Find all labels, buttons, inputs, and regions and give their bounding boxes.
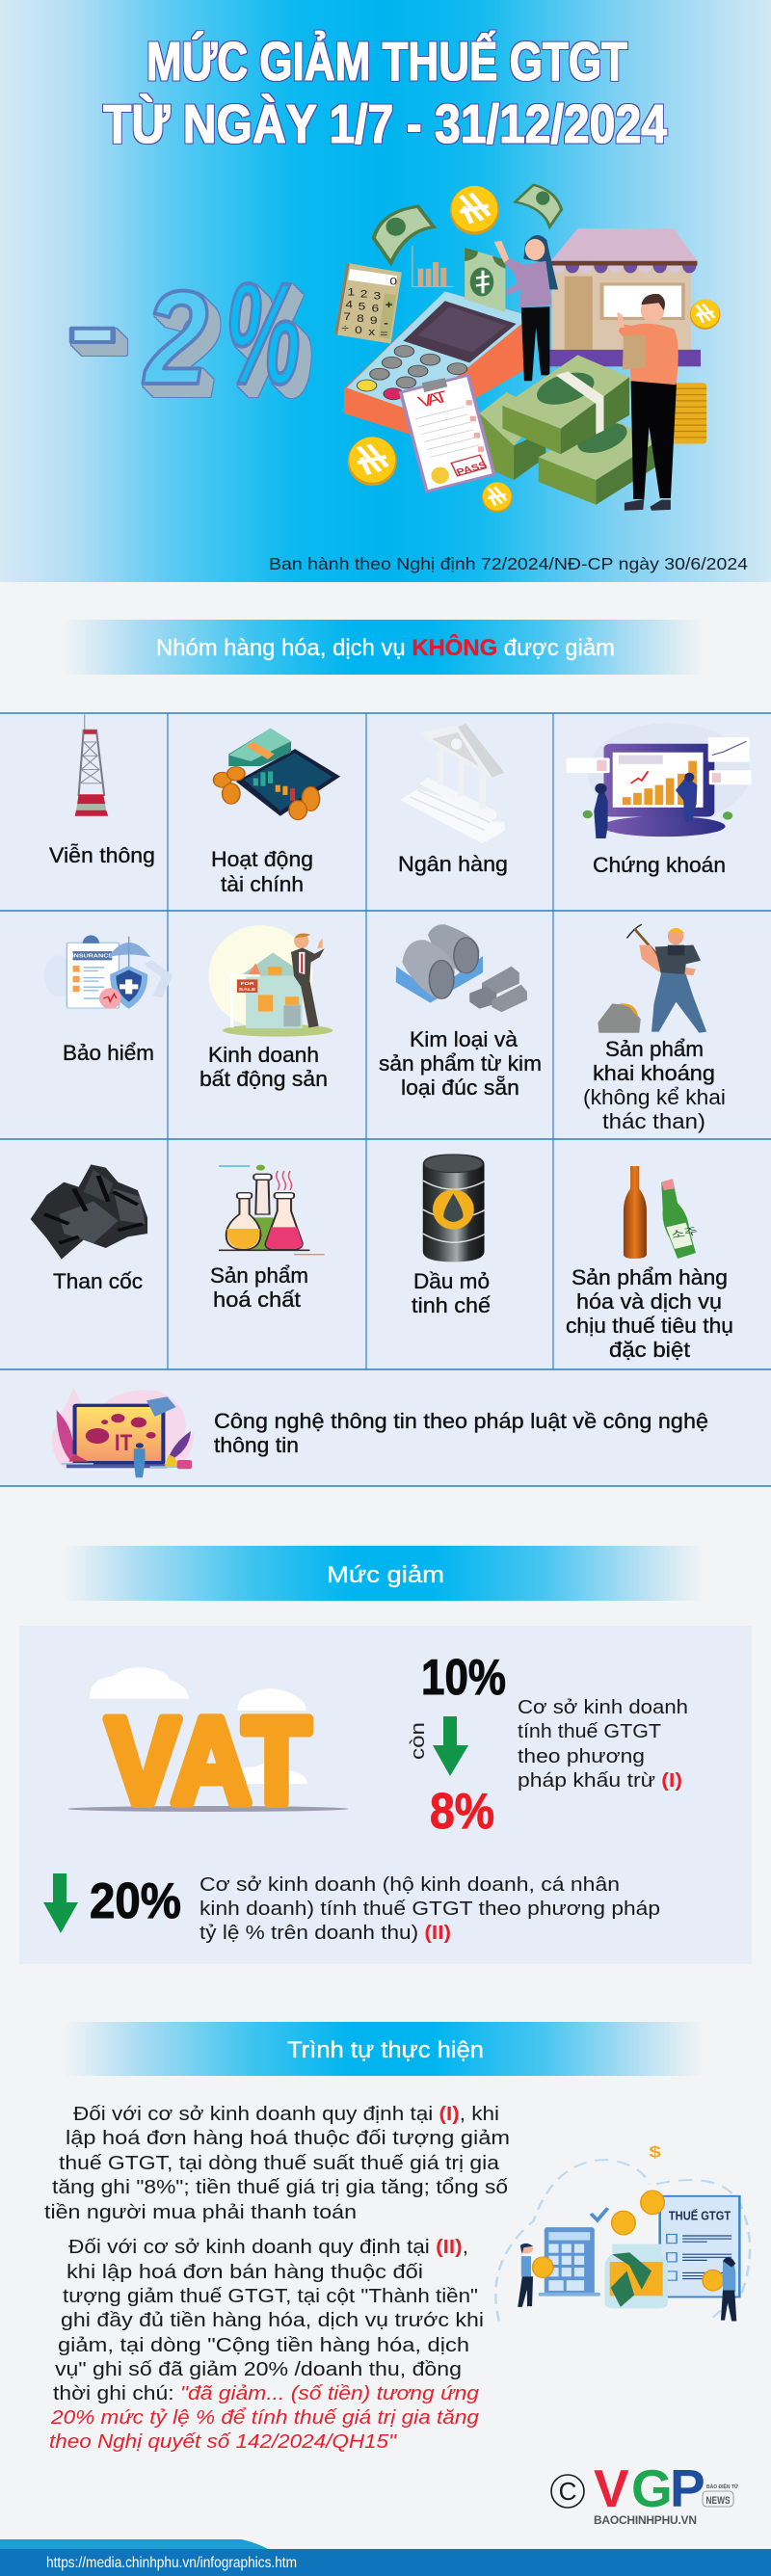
POS terminal xyxy=(344,291,532,435)
title: MỨC GIẢM THUẾ GTGT xyxy=(146,30,627,93)
calculator: ÷ xyxy=(341,322,349,334)
table labels row two: bất động sản xyxy=(199,1067,328,1091)
tick xyxy=(591,2208,608,2220)
label: remaining: còn xyxy=(408,1722,429,1760)
table labels row two: loại đúc sẵn xyxy=(401,1076,519,1100)
banknote in terminal xyxy=(465,248,505,312)
logo: VGP News: NEWS xyxy=(705,2495,731,2507)
table labels row two: Bảo hiểm xyxy=(63,1041,154,1065)
heading: excluded goods and services xyxy=(64,620,704,675)
man xyxy=(617,294,678,511)
arrow: down for 20 percent xyxy=(43,1873,78,1933)
text: procedure for case two xyxy=(49,2237,484,2453)
text: method one description: pháp khấu trừ (I) xyxy=(518,1770,682,1792)
VAT clipboard: VAT xyxy=(416,388,451,412)
text: method one description xyxy=(518,1697,688,1792)
jar of coins and money xyxy=(605,2244,668,2308)
table labels row three: Sản phẩm hàng xyxy=(572,1265,728,1289)
text: procedure for case two: Đối với cơ sở kinh doanh quy định tại (II), xyxy=(68,2237,468,2258)
icon: real estate xyxy=(208,925,332,1037)
panel: excluded goods table xyxy=(0,713,771,1486)
icon: telecom tower xyxy=(75,714,108,816)
table labels row three: đặc biệt xyxy=(609,1338,690,1362)
icon: coke coal xyxy=(31,1164,147,1260)
icon: insurance: INSURANCE xyxy=(72,953,113,959)
table labels row one: Hoạt động xyxy=(211,847,313,871)
table label row four: Công nghệ thông tin theo pháp luật về công nghệ xyxy=(214,1409,708,1433)
panel: reduction rates xyxy=(19,1626,752,1964)
bar chart xyxy=(412,246,453,287)
table labels row two: sản phẩm từ kim xyxy=(379,1051,542,1076)
table label row four: thông tin xyxy=(214,1433,299,1457)
logo: VGP News: BÁO ĐIỆN TỬ xyxy=(706,2483,739,2490)
text: procedure for case one: tiền người mua phải thanh toán xyxy=(44,2202,357,2223)
logo: VGP News: BAOCHINHPHU.VN xyxy=(594,2513,697,2527)
calculator: 3 xyxy=(373,290,381,302)
floating banknotes xyxy=(374,185,562,263)
rate: 10 percent: 10% xyxy=(421,1650,506,1706)
text: procedure for case two: vụ" ghi số đã giảm 20% /doanh thu, đồng xyxy=(55,2359,462,2380)
calculator xyxy=(539,2227,600,2297)
people xyxy=(518,2244,736,2321)
icon: metal rolls xyxy=(396,924,527,1012)
text: procedure for case two: ghi đầy đủ tiền hàng hóa, dịch vụ trước khi xyxy=(61,2310,484,2331)
text: method one description: Cơ sở kinh doanh xyxy=(518,1697,688,1718)
heading: excluded goods and services: Nhóm hàng hóa, dịch vụ KHÔNG được giảm xyxy=(156,634,615,661)
arrow: down to 8 percent xyxy=(433,1716,468,1776)
heading: reduction level: Mức giảm xyxy=(327,1562,444,1588)
calculator: 0 xyxy=(355,324,362,335)
text: procedure for case one xyxy=(44,2104,510,2223)
gold coins xyxy=(533,2191,724,2291)
table labels row one: tài chính xyxy=(221,872,304,896)
heading: procedure: Trình tự thực hiện xyxy=(287,2037,484,2063)
icon: securities chart xyxy=(567,723,752,838)
text: method one description: tính thuế GTGT xyxy=(518,1721,661,1742)
table labels row two: (không kể khai xyxy=(583,1085,726,1109)
table labels row one: Ngân hàng xyxy=(398,852,508,876)
icon: information technology xyxy=(52,1388,195,1477)
illustration: payment, money and shop xyxy=(334,185,720,513)
VAT clipboard xyxy=(401,375,494,491)
calculator: 2 xyxy=(360,288,368,300)
table labels row three: Sản phẩm xyxy=(210,1263,308,1288)
icon: bank building xyxy=(400,724,505,843)
woman xyxy=(494,235,558,381)
calculator: 5 xyxy=(359,301,365,312)
text: procedure for case one: tăng ghi "8%"; tiền thuế giá trị gia tăng; tổng số xyxy=(52,2177,508,2198)
footer bar xyxy=(0,2539,771,2576)
icon: VAT lettering with clouds: VAT xyxy=(106,1692,310,1829)
copyright mark xyxy=(551,2475,584,2508)
table labels row one xyxy=(49,843,726,896)
text: procedure for case two: thời ghi chú: "đã giảm... (số tiền) tương ứng xyxy=(53,2383,479,2404)
text: method one description: theo phương xyxy=(518,1746,645,1767)
logo: VGP News: G xyxy=(631,2458,673,2518)
calculator: 6 xyxy=(371,303,379,314)
VAT clipboard: PASS xyxy=(455,460,489,478)
coin stack xyxy=(669,383,706,444)
dollar sign: $ xyxy=(649,2143,661,2162)
text: procedure for case two: giảm, tại dòng "Cộng tiền hàng hóa, dịch xyxy=(58,2335,469,2356)
table icons row three and four xyxy=(31,1154,700,1477)
table labels row two: Kinh doanh xyxy=(208,1043,319,1067)
footer bar: https://media.chinhphu.vn/infographics.htm xyxy=(46,2555,297,2571)
calculator: 8 xyxy=(357,313,364,325)
text: procedure for case two: theo Nghị quyết số 142/2024/QH15" xyxy=(49,2431,397,2453)
text: method two description: tỷ lệ % trên doanh thu) (II) xyxy=(199,1923,451,1944)
rate: 20 percent: 20% xyxy=(90,1873,181,1929)
minus two percent graphic xyxy=(66,252,301,414)
table labels row two: khai khoáng xyxy=(593,1061,715,1085)
tax document: THUẾ GTGT xyxy=(669,2209,731,2223)
table labels row three: hoá chất xyxy=(213,1288,301,1312)
table labels row two: thác than) xyxy=(602,1109,705,1133)
minus two percent graphic: - xyxy=(66,261,120,390)
table label row four xyxy=(214,1409,708,1457)
icon: real estate: SALE xyxy=(239,988,256,992)
calculator xyxy=(334,263,402,344)
table labels row two: Sản phẩm xyxy=(605,1037,704,1061)
logo: VGP News: V xyxy=(594,2458,629,2518)
minus two percent graphic: 2 xyxy=(142,264,208,412)
table labels row one: Chứng khoán xyxy=(593,853,726,877)
heading: reduction level xyxy=(64,1546,704,1601)
table icons row one and two xyxy=(44,714,752,1037)
calculator: x xyxy=(368,326,376,337)
table labels row three: chịu thuế tiêu thụ xyxy=(566,1314,733,1338)
table labels row three: hóa và dịch vụ xyxy=(576,1289,722,1314)
store xyxy=(546,228,701,366)
calculator: 9 xyxy=(370,314,378,327)
table labels row three: Dầu mỏ xyxy=(413,1269,490,1293)
tax document xyxy=(660,2196,739,2297)
text: method two description: kinh doanh) tính thuế GTGT theo phương pháp xyxy=(199,1899,660,1920)
text: procedure for case one: Đối với cơ sở kinh doanh quy định tại (I), khi xyxy=(73,2104,499,2125)
icon: insurance xyxy=(44,936,167,1009)
calculator: 7 xyxy=(343,311,351,323)
table labels row three xyxy=(53,1263,733,1362)
table labels row one: Viễn thông xyxy=(49,843,155,867)
text: procedure for case one: thuế GTGT, tại dòng thuế suất thuế giá trị gia xyxy=(59,2153,500,2174)
icon: beer and soju bottles xyxy=(624,1166,700,1259)
table labels row three: tinh chế xyxy=(412,1293,491,1317)
calculator: 4 xyxy=(345,299,353,310)
icon: VAT lettering with clouds xyxy=(67,1667,348,1829)
text: procedure for case one: lập hoá đơn hàng hoá thuộc đối tượng giảm xyxy=(66,2128,510,2149)
title: TỪ NGÀY 1/7 - 31/12/2024 xyxy=(103,93,667,155)
copyright mark: C xyxy=(559,2477,576,2506)
icon: information technology: IT xyxy=(115,1429,132,1455)
panel: hero banner xyxy=(0,0,771,582)
heading: procedure xyxy=(64,2022,704,2076)
icon: real estate: FOR xyxy=(241,982,255,987)
logo: VGP News: P xyxy=(670,2458,705,2518)
table labels row two xyxy=(63,1027,726,1133)
icon: finance tablet and money xyxy=(213,729,340,820)
calculator: 0 xyxy=(389,276,397,287)
rate: 8 percent: 8% xyxy=(430,1784,494,1840)
coins xyxy=(348,186,720,513)
calculator: + xyxy=(386,300,393,311)
text: method two description: Cơ sở kinh doanh (hộ kinh doanh, cá nhân xyxy=(199,1874,620,1896)
icon: chemical flasks xyxy=(219,1165,325,1255)
text: procedure for case two: tượng giảm thuế GTGT, tại cột "Thành tiền" xyxy=(63,2286,478,2307)
icon: beer and soju bottles: 소주 xyxy=(669,1225,700,1240)
calculator: 1 xyxy=(347,286,355,298)
icon: miner xyxy=(598,924,706,1033)
icon: oil barrel xyxy=(423,1154,486,1261)
calculator: = xyxy=(380,329,387,340)
logo: VGP News xyxy=(551,2458,739,2527)
text: procedure for case two: khi lập hoá đơn bán hàng thuộc đối xyxy=(66,2262,423,2283)
table labels row two: Kim loại và xyxy=(410,1027,518,1051)
text: method two description xyxy=(199,1874,660,1944)
table labels row three: Than cốc xyxy=(53,1269,143,1293)
illustration: VAT declaration and savings xyxy=(495,2143,750,2321)
minus two percent graphic: % xyxy=(226,252,301,414)
decree note: Ban hành theo Nghị định 72/2024/NĐ-CP ngày 30/6/2024 xyxy=(269,554,748,573)
calculator: - xyxy=(384,317,388,329)
title xyxy=(103,30,667,155)
money stacks xyxy=(479,355,656,505)
text: procedure for case two: 20% mức tỷ lệ % để tính thuế giá trị gia tăng xyxy=(50,2407,479,2429)
